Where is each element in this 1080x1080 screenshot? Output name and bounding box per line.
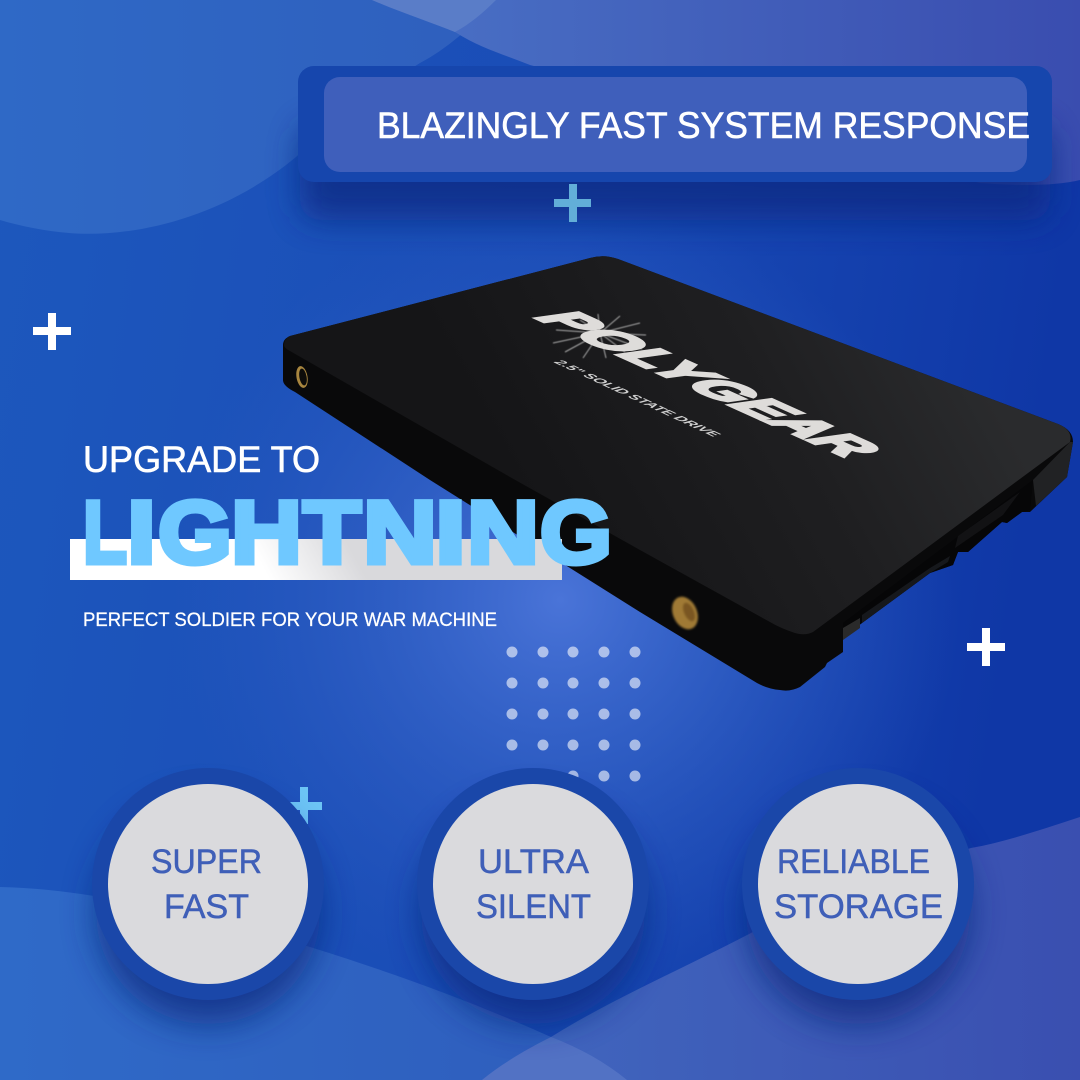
plus icon: top centre (554, 184, 591, 222)
plus icon: left (33, 313, 71, 350)
headline: lightning: H (231, 482, 302, 582)
headline: lightning: I (435, 482, 466, 582)
headline: upgrade to: UPGRADE TO (83, 439, 320, 480)
feature badge: ultra silent: ULTRA (478, 843, 589, 881)
headline: lightning: N (363, 482, 437, 582)
feature badge: super fast (92, 768, 324, 1024)
feature badge: ultra silent (417, 768, 649, 1024)
header banner (298, 66, 1052, 182)
drive body (283, 256, 1073, 691)
headline highlight bar (70, 539, 562, 580)
subtitle: PERFECT SOLDIER FOR YOUR WAR MACHINE (83, 609, 497, 631)
feature badge: reliable storage: STORAGE (774, 888, 943, 926)
headline: lightning: G (540, 482, 612, 582)
feature badge: reliable storage: RELIABLE (777, 843, 930, 881)
headline: lightning: T (303, 482, 361, 582)
feature badge: reliable storage (742, 768, 974, 1024)
header shadow (300, 125, 1050, 220)
logo circuit mark (553, 314, 646, 358)
feature badge: super fast: FAST (164, 888, 249, 926)
screw hole: front (667, 593, 703, 633)
logo wordmark: POLYGEAR (523, 306, 892, 461)
feature badge: ultra silent: SILENT (476, 888, 591, 926)
headline: lightning: G (158, 482, 232, 582)
SSD drive (283, 256, 1073, 691)
headline: lightning: L (83, 482, 127, 582)
feature badge: super fast: SUPER (151, 843, 262, 881)
dot grid (506, 646, 640, 782)
logo tagline: 2.5" SOLID STATE DRIVE (550, 359, 725, 438)
screw hole: left (295, 365, 309, 389)
plus icon: behind first circle (286, 787, 322, 824)
headline: lightning: N (467, 482, 539, 582)
headline: lightning: I (127, 482, 156, 582)
connector (843, 480, 1033, 640)
header banner: BLAZINGLY FAST SYSTEM RESPONSE (377, 104, 1030, 146)
drive top face (284, 256, 1070, 634)
plus icon: right (967, 628, 1005, 666)
right edge of the drive (1033, 442, 1073, 506)
